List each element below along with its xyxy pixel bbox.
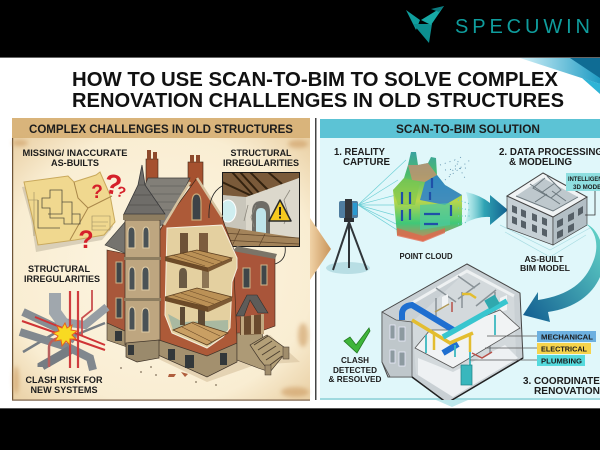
upper floor slab xyxy=(415,310,520,368)
label: clash risk xyxy=(26,375,103,395)
arrow: curved to coordinated model xyxy=(523,224,600,322)
gable window xyxy=(192,194,201,220)
foundation xyxy=(158,340,237,377)
panel: complex challenges xyxy=(12,118,310,401)
main roof xyxy=(145,178,190,226)
brick body xyxy=(159,178,237,358)
wooden floors xyxy=(165,250,232,345)
inset: damaged interior xyxy=(220,172,300,246)
porch xyxy=(236,295,270,372)
tower xyxy=(123,214,165,362)
logo: Specuwin: SPECUWIN xyxy=(455,16,590,38)
legend: MEP systems xyxy=(470,331,596,366)
icon: question marks: ? xyxy=(102,168,124,201)
label: structural irregularities top: STRUCTURAL xyxy=(230,148,292,158)
page background xyxy=(0,57,600,408)
lower left roof xyxy=(105,222,127,254)
icon: torn floor plan map xyxy=(22,172,115,252)
plumbing lines xyxy=(426,315,495,366)
label: point cloud: POINT CLOUD xyxy=(400,252,453,261)
BIM model xyxy=(500,173,595,257)
MEP cutaway model xyxy=(382,264,523,403)
label: clash risk: NEW SYSTEMS xyxy=(30,385,98,395)
label: missing as-builts xyxy=(22,148,128,168)
legend: plumbing: PLUMBING xyxy=(541,356,582,366)
label: clash risk: CLASH RISK FOR xyxy=(26,375,103,385)
point cloud house xyxy=(393,152,470,242)
icon: question marks: ? xyxy=(78,226,94,254)
air duct xyxy=(443,301,507,337)
panel header: solution: SCAN-TO-BIM SOLUTION xyxy=(396,122,540,136)
small pointer below panel xyxy=(436,400,468,407)
icon: clash burst xyxy=(53,323,77,346)
panel header: challenges xyxy=(12,118,310,138)
interior cutaway xyxy=(165,225,237,348)
panel header: challenges: COMPLEX CHALLENGES IN OLD STRUCTURES xyxy=(29,122,293,136)
label: clash detected: DETECTED xyxy=(333,365,377,375)
label: missing as-builts: MISSING/ INACCURATE xyxy=(22,148,128,158)
label: structural irregularities lower xyxy=(24,264,100,284)
mechanical duct xyxy=(402,305,458,353)
building illustration xyxy=(105,150,300,385)
stairs xyxy=(250,335,289,375)
panel: scan-to-bim solution xyxy=(315,118,600,400)
logo: Specuwin xyxy=(406,6,590,43)
title: HOW TO USE SCAN-TO-BIM TO SOLVE COMPLEX xyxy=(72,69,559,91)
right wing xyxy=(233,250,275,340)
step 2 label xyxy=(499,147,600,168)
legend: mechanical: MECHANICAL xyxy=(541,332,593,342)
laser rays xyxy=(358,160,406,235)
title xyxy=(72,69,564,112)
tank xyxy=(461,365,472,385)
panel header: solution xyxy=(320,119,600,138)
chimneys xyxy=(146,150,203,186)
label: missing as-builts: AS-BUILTS xyxy=(51,158,99,168)
arrow: to BIM model xyxy=(465,192,508,225)
legend: electrical: ELECTRICAL xyxy=(541,344,587,354)
label: clash detected: & RESOLVED xyxy=(328,374,382,384)
step 3 label xyxy=(523,376,600,397)
arrow: between panels xyxy=(310,218,331,280)
label: structural irregularities top xyxy=(223,148,299,168)
step 1 label: 1. REALITY xyxy=(334,147,385,158)
ground shadow xyxy=(150,335,300,382)
decorative corner triangles xyxy=(520,58,600,94)
label: clash detected: CLASH xyxy=(341,355,369,365)
icon: question marks: ? xyxy=(114,183,128,202)
step 3 label: RENOVATION xyxy=(534,386,600,397)
label: structural irregularities lower: IRREGULARITIES xyxy=(24,274,100,284)
rubble xyxy=(168,372,188,377)
icon: question marks: ? xyxy=(91,182,103,203)
tower roof xyxy=(124,165,165,214)
icon: laser scanner on tripod xyxy=(326,199,370,274)
icon: warning sign xyxy=(269,200,291,221)
title: RENOVATION CHALLENGES IN OLD STRUCTURES xyxy=(72,90,564,112)
label: clash detected xyxy=(328,355,382,384)
electrical tray xyxy=(412,320,473,343)
left brick wall xyxy=(107,250,127,332)
label: structural irregularities lower: STRUCTURAL xyxy=(28,264,90,274)
bay window xyxy=(382,312,412,377)
icon: question marks xyxy=(78,168,128,254)
step 1 label: CAPTURE xyxy=(343,157,390,168)
icon: green check xyxy=(344,328,370,353)
icon: clashing pipes xyxy=(20,290,107,370)
step 2 label: & MODELING xyxy=(509,157,572,168)
pointer lines xyxy=(209,186,285,264)
label: structural irregularities top: IRREGULARITIES xyxy=(223,158,299,168)
lower floor xyxy=(418,345,518,397)
step 1 label xyxy=(334,147,390,168)
label: as-built BIM model: BIM MODEL xyxy=(520,263,570,273)
tag: intelligent 3D model xyxy=(566,173,600,191)
label: as-built BIM model xyxy=(520,254,570,273)
label: as-built BIM model: AS-BUILT xyxy=(524,254,564,264)
